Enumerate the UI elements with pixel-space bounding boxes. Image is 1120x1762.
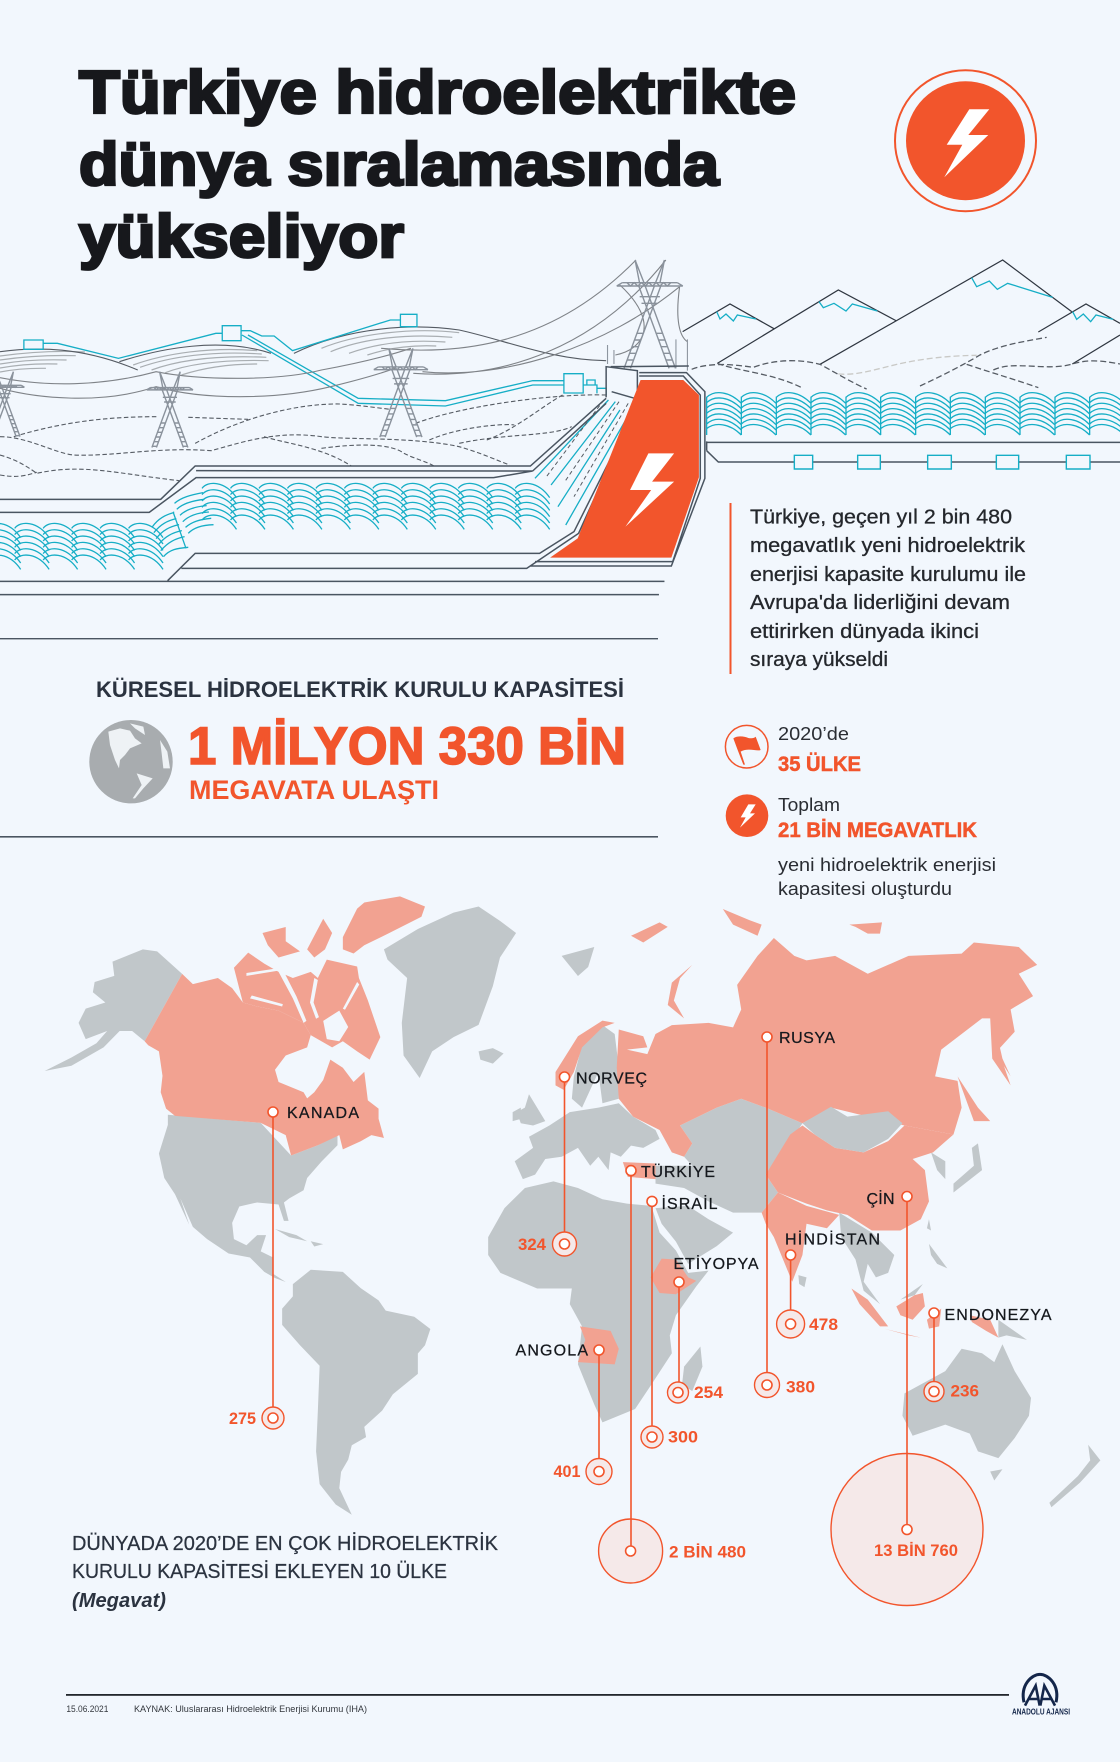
- Indonesia: [851, 1288, 998, 1338]
- icon: flag: [725, 725, 768, 768]
- stat: megawatts: kapasitesi oluşturdu: [778, 879, 952, 899]
- Arctic channels and Foxe Basin: [246, 968, 359, 1041]
- water left: [0, 493, 214, 569]
- marker: Norveç: [518, 1070, 647, 1256]
- Arabia: [656, 1206, 733, 1264]
- world map: Eurasia, Africa, Oceania: [488, 909, 1100, 1507]
- marker: Angola: 401: [554, 1463, 580, 1481]
- logo: Anadolu Ajansı: [1012, 1674, 1070, 1716]
- paragraph with red rule: enerjisi kapasite kurulumu ile: [750, 564, 1026, 586]
- marker: Türkiye: 2 BİN 480: [669, 1544, 746, 1562]
- water right: [707, 393, 1120, 435]
- heading: KÜRESEL HİDROELEKTRİK KURULU KAPASİTESİ: [96, 677, 624, 702]
- conduit with sluice boxes: [707, 441, 1120, 469]
- paragraph with red rule: sıraya yükseldi: [750, 649, 888, 671]
- Tasmania and New Zealand: [990, 1445, 1100, 1507]
- mountains: [683, 260, 1120, 389]
- title: yükseliyor: [79, 203, 404, 270]
- Greenland: [384, 907, 516, 1078]
- marker: Hindistan: HİNDİSTAN: [785, 1230, 880, 1248]
- Norway: [556, 1021, 615, 1090]
- cables: [0, 260, 687, 398]
- marker: Kanada: KANADA: [287, 1105, 359, 1122]
- marker: Endonezya: 236: [950, 1382, 979, 1400]
- spillway lines: [535, 400, 631, 525]
- Russian Arctic islands and Sakhalin: [631, 909, 1011, 1121]
- marker: Türkiye: [599, 1162, 746, 1583]
- marker: İsrail: 300: [668, 1428, 698, 1446]
- marker: İsrail: İSRAİL: [662, 1194, 718, 1213]
- icon: globe: [89, 720, 173, 803]
- marker: Türkiye: TÜRKİYE: [641, 1162, 715, 1181]
- marker: Endonezya: [924, 1307, 1052, 1402]
- icon: bolt circle: [726, 794, 768, 837]
- marker: Rusya: [754, 1030, 835, 1398]
- stat: megawatts: yeni hidroelektrik enerjisi: [778, 855, 996, 875]
- marker: Hindistan: 478: [809, 1316, 838, 1334]
- marker: Rusya: 380: [786, 1378, 815, 1396]
- marker: İsrail: [641, 1194, 718, 1448]
- Central Asia and Middle East: [656, 1099, 802, 1213]
- marker: Etiyopya: [668, 1254, 759, 1403]
- Canadian Arctic islands: [234, 896, 425, 1060]
- Ethiopia: [651, 1259, 696, 1294]
- East Asia islands: [798, 1143, 1027, 1340]
- illustration: mountains and reservoir: [683, 260, 1120, 469]
- Sweden and Finland: [572, 1025, 619, 1108]
- map caption: DÜNYADA 2020’DE EN ÇOK HİDROELEKTRİK: [72, 1532, 499, 1555]
- footer: [66, 1694, 1009, 1714]
- panel: global capacity: [0, 638, 658, 838]
- icon: dam lightning bolt: [625, 453, 674, 527]
- India: [762, 1193, 839, 1282]
- marker: Angola: [516, 1342, 612, 1484]
- pylons: [0, 260, 687, 447]
- USA and Central America: [159, 1115, 337, 1282]
- footer: 15.06.2021: [66, 1704, 108, 1714]
- marker: Etiyopya: 254: [694, 1384, 724, 1402]
- Turkey: [623, 1162, 656, 1179]
- map caption: (Megavat): [72, 1590, 166, 1612]
- South America: [282, 1270, 430, 1515]
- map caption: [72, 1532, 499, 1612]
- dashed slopes: [0, 395, 606, 481]
- Southeast Asia: [839, 1213, 894, 1304]
- marker: Rusya: RUSYA: [779, 1030, 835, 1047]
- Madagascar: [682, 1347, 702, 1391]
- footer: KAYNAK: Uluslararası Hidroelektrik Enerjisi Kurumu (IHA): [134, 1704, 367, 1714]
- Russia: [617, 938, 1037, 1157]
- Canada: [145, 974, 384, 1156]
- paragraph with red rule: megavatlık yeni hidroelektrik: [750, 535, 1026, 557]
- big number: 1 MİLYON 330 BİN: [188, 717, 626, 776]
- stat: megawatts: Toplam: [778, 795, 840, 815]
- Mongolia: [802, 1107, 902, 1152]
- water centre: [202, 483, 550, 529]
- marker: Çin: ÇİN: [866, 1189, 894, 1208]
- stat: megawatts: [726, 794, 996, 899]
- marker: Çin: 13 BİN 760: [874, 1542, 958, 1560]
- Alaska: [45, 949, 182, 1071]
- hills: [0, 327, 606, 375]
- Svalbard: [562, 947, 594, 976]
- Africa: [488, 1181, 709, 1422]
- title: [79, 59, 796, 270]
- marker: Norveç: NORVEÇ: [576, 1070, 647, 1088]
- title: Türkiye hidroelektrikte: [79, 59, 796, 126]
- marker: Hindistan: [777, 1230, 880, 1338]
- rails: [0, 366, 705, 595]
- teal conduits: [24, 314, 606, 406]
- marker: Kanada: 275: [229, 1410, 256, 1428]
- Caribbean: [275, 1229, 323, 1247]
- icon: lightning badge: [895, 70, 1036, 211]
- logo: Anadolu Ajansı: ANADOLU AJANSI: [1012, 1708, 1070, 1716]
- world map: Americas: [45, 896, 516, 1515]
- paragraph with red rule: Türkiye, geçen yıl 2 bin 480: [750, 506, 1012, 528]
- marker: Endonezya: ENDONEZYA: [944, 1307, 1052, 1324]
- marker: Etiyopya: ETİYOPYA: [674, 1254, 759, 1273]
- marker: Norveç: 324: [518, 1236, 547, 1254]
- stat: megawatts: 21 BİN MEGAVATLIK: [778, 819, 977, 842]
- paragraph with red rule: [730, 503, 1026, 674]
- marker: Çin: [831, 1189, 983, 1606]
- Angola: [578, 1326, 619, 1364]
- China: [766, 1126, 953, 1230]
- paragraph with red rule: ettirirken dünyada ikinci: [750, 621, 979, 643]
- marker: Kanada: [229, 1105, 359, 1429]
- paragraph with red rule: Avrupa'da liderliğini devam: [750, 592, 1010, 614]
- Australia: [902, 1344, 1031, 1458]
- marker: Angola: ANGOLA: [516, 1342, 588, 1360]
- map caption: KURULU KAPASİTESİ EKLEYEN 10 ÜLKE: [72, 1560, 447, 1583]
- Iceland: [479, 1048, 504, 1064]
- illustration: dam, hills and pylons: [0, 260, 705, 595]
- stat: countries: 2020’de: [778, 724, 849, 744]
- stat: countries: [725, 724, 861, 776]
- Europe: [515, 1103, 660, 1184]
- British Isles: [513, 1094, 545, 1126]
- subline: MEGAVATA ULAŞTI: [189, 775, 439, 805]
- dam face: [550, 380, 699, 558]
- title: dünya sıralamasında: [79, 131, 720, 198]
- stat: countries: 35 ÜLKE: [778, 753, 861, 776]
